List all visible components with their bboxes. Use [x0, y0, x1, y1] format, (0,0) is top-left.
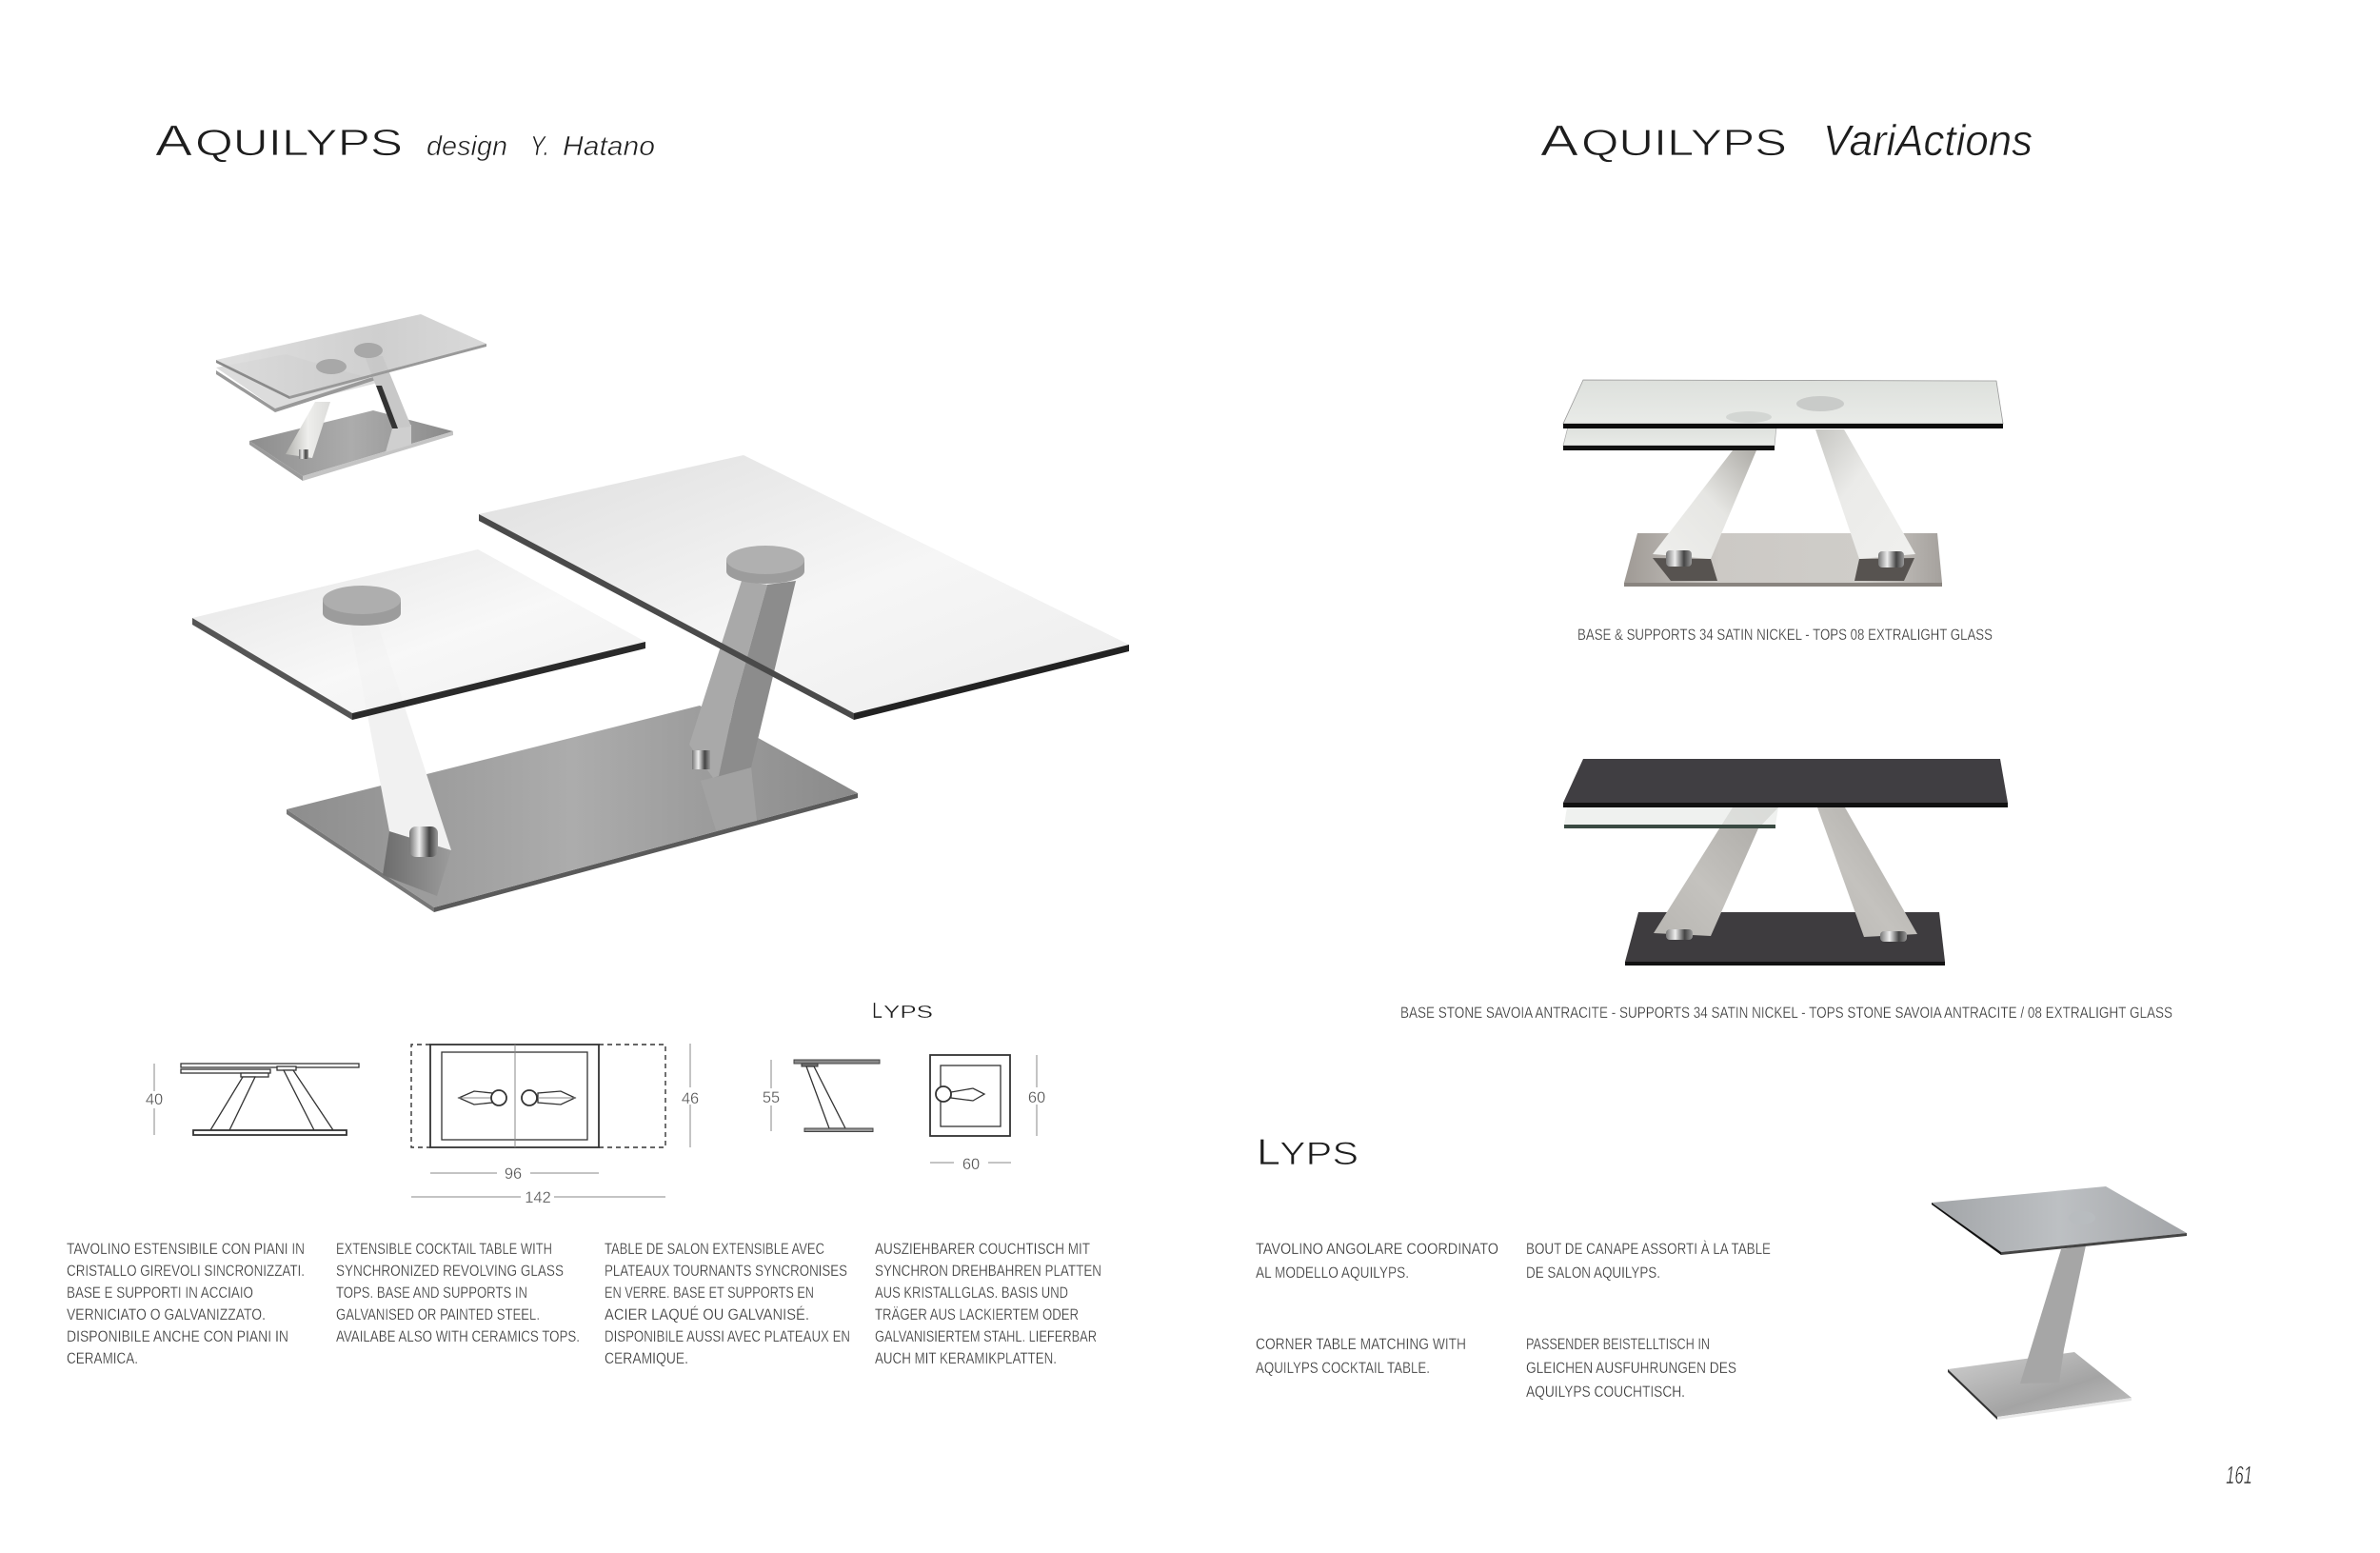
page number: 161 — [2226, 1461, 2252, 1489]
text: Lyps English — [1256, 1336, 1466, 1377]
text: Lyps English: AQUILYPS COCKTAIL TABLE. — [1256, 1360, 1430, 1377]
drawing: Lyps top plan with dimensions: 60 — [1028, 1089, 1045, 1106]
label: Lyps (drawings): YPS — [883, 1003, 933, 1022]
title: Aquilyps VariActions — [1540, 116, 2033, 165]
drawing: Aquilyps side elevation — [146, 1064, 359, 1135]
text: Lyps English: CORNER TABLE MATCHING WITH — [1256, 1336, 1466, 1353]
text: French description: TABLE DE SALON EXTENSIBLE AVEC — [605, 1241, 824, 1258]
text: French description: EN VERRE. BASE ET SUPPORTS EN — [605, 1284, 814, 1302]
text: German description: AUS KRISTALLGLAS. BASIS UND — [875, 1284, 1068, 1302]
text: Italian description: VERNICIATO O GALVANIZZATO. — [67, 1306, 266, 1324]
drawing: Aquilyps side elevation: 40 — [146, 1091, 163, 1108]
text: Lyps French: DE SALON AQUILYPS. — [1526, 1264, 1660, 1282]
front support — [349, 619, 451, 896]
drawing: Lyps top plan with dimensions: 60 — [962, 1156, 980, 1173]
back glass front edge — [479, 514, 854, 720]
drawing: Aquilyps top plan with dimensions — [411, 1044, 699, 1206]
text: Lyps German — [1526, 1336, 1736, 1401]
supports — [1653, 429, 1915, 581]
drawing: Lyps side elevation — [763, 1060, 880, 1131]
text: Lyps German: AQUILYPS COUCHTISCH. — [1526, 1384, 1685, 1401]
text: Italian description: DISPONIBILE ANCHE CON PIANI IN — [67, 1328, 288, 1345]
text: Lyps Italian: TAVOLINO ANGOLARE COORDINATO — [1256, 1241, 1498, 1258]
drawing: Aquilyps top plan with dimensions: 96 — [505, 1165, 522, 1183]
caption: glass variation: BASE & SUPPORTS 34 SATIN NICKEL - TOPS 08 EXTRALIGHT GLASS — [1577, 627, 1993, 644]
text: Lyps Italian — [1256, 1241, 1498, 1282]
text: French description: PLATEAUX TOURNANTS SYNCRONISES — [605, 1263, 847, 1280]
text: Italian description: TAVOLINO ESTENSIBILE CON PIANI IN — [67, 1241, 305, 1258]
text: German description: GALVANISIERTEM STAHL. LIEFERBAR — [875, 1328, 1097, 1345]
drawing: Aquilyps top plan with dimensions: 142 — [525, 1189, 551, 1206]
text: English description: EXTENSIBLE COCKTAIL TABLE WITH — [336, 1241, 552, 1258]
stone top — [1563, 759, 2008, 807]
text: Lyps French — [1526, 1240, 1771, 1282]
text: French description: DISPONIBILE AUSSI AVEC PLATEAUX EN — [605, 1328, 850, 1345]
base — [1624, 533, 1942, 587]
text: English description: AVAILABE ALSO WITH CERAMICS TOPS. — [336, 1328, 580, 1345]
text: German description: AUCH MIT KERAMIKPLATTEN. — [875, 1350, 1057, 1367]
drawing: Aquilyps top plan with dimensions: 46 — [682, 1090, 699, 1107]
text: Lyps Italian: AL MODELLO AQUILYPS. — [1256, 1264, 1409, 1282]
text: German description: AUSZIEHBARER COUCHTISCH MIT — [875, 1241, 1090, 1258]
text: English description: GALVANISED OR PAINTED STEEL. — [336, 1306, 540, 1324]
lower glass — [1563, 427, 1776, 450]
back support — [689, 546, 804, 830]
photo: stone top variation — [1563, 759, 2008, 966]
title: Aquilyps VariActions: QUILYPS — [1581, 123, 1787, 164]
base plate — [287, 706, 858, 912]
title: Aquilyps design Y. Hatano: QUILYPS — [195, 123, 403, 164]
label: Lyps (drawings): L — [872, 998, 883, 1023]
photo: large Aquilyps table, open — [192, 455, 1129, 912]
supports — [1654, 807, 1917, 942]
heading: Lyps — [1257, 1132, 1359, 1173]
text: Italian description: BASE E SUPPORTI IN ACCIAIO — [67, 1284, 253, 1302]
title: Aquilyps VariActions: A — [1540, 116, 1578, 165]
title: Aquilyps design Y. Hatano: Y. — [530, 131, 549, 162]
title: Aquilyps design Y. Hatano: design — [426, 131, 507, 162]
upper glass — [1563, 380, 2003, 428]
title: Aquilyps design Y. Hatano — [155, 116, 655, 165]
text: Italian description: CERAMICA. — [67, 1350, 138, 1367]
title: Aquilyps VariActions: VariActions — [1823, 116, 2033, 165]
text: German description: TRÄGER AUS LACKIERTEM ODER — [875, 1306, 1079, 1324]
text: Italian description: CRISTALLO GIREVOLI SINCRONIZZATI. — [67, 1263, 305, 1280]
text: English description: TOPS. BASE AND SUPPORTS IN — [336, 1284, 527, 1302]
text: English description: SYNCHRONIZED REVOLVING GLASS — [336, 1263, 564, 1280]
photo: glass top variation — [1563, 380, 2003, 587]
title: Aquilyps design Y. Hatano: Hatano — [563, 131, 655, 162]
heading: Lyps: L — [1257, 1132, 1280, 1173]
caption: stone variation: BASE STONE SAVOIA ANTRACITE - SUPPORTS 34 SATIN NICKEL - TOPS STONE SAVOIA ANTRACITE / 08 EXTRALIGHT GLASS — [1400, 1005, 2172, 1022]
base — [1625, 912, 1945, 966]
text: English description — [336, 1241, 580, 1345]
text: Lyps German: PASSENDER BEISTELLTISCH IN — [1526, 1336, 1710, 1353]
text: French description: ACIER LAQUÉ OU GALVANISÉ. — [605, 1305, 809, 1324]
text: Italian description — [67, 1241, 305, 1367]
photo: Lyps corner table — [1932, 1186, 2187, 1420]
text: German description — [875, 1241, 1101, 1367]
heading: Lyps: YPS — [1279, 1136, 1359, 1172]
drawing: Lyps side elevation: 55 — [763, 1089, 780, 1106]
text: German description: SYNCHRON DREHBAHREN PLATTEN — [875, 1263, 1101, 1280]
photo: small Aquilyps table, closed — [216, 314, 486, 481]
text: Lyps French: BOUT DE CANAPE ASSORTI À LA TABLE — [1526, 1240, 1771, 1258]
text: French description — [605, 1241, 850, 1367]
front cap — [323, 586, 401, 626]
title: Aquilyps design Y. Hatano: A — [155, 116, 192, 165]
text: Lyps German: GLEICHEN AUSFUHRUNGEN DES — [1526, 1360, 1736, 1377]
front glass top — [192, 549, 645, 720]
text: French description: CERAMIQUE. — [605, 1350, 688, 1367]
drawing: Lyps top plan with dimensions — [930, 1055, 1045, 1173]
back glass top — [479, 455, 1129, 720]
lower glass — [1564, 807, 1778, 828]
label: Lyps (drawings) — [872, 998, 933, 1023]
